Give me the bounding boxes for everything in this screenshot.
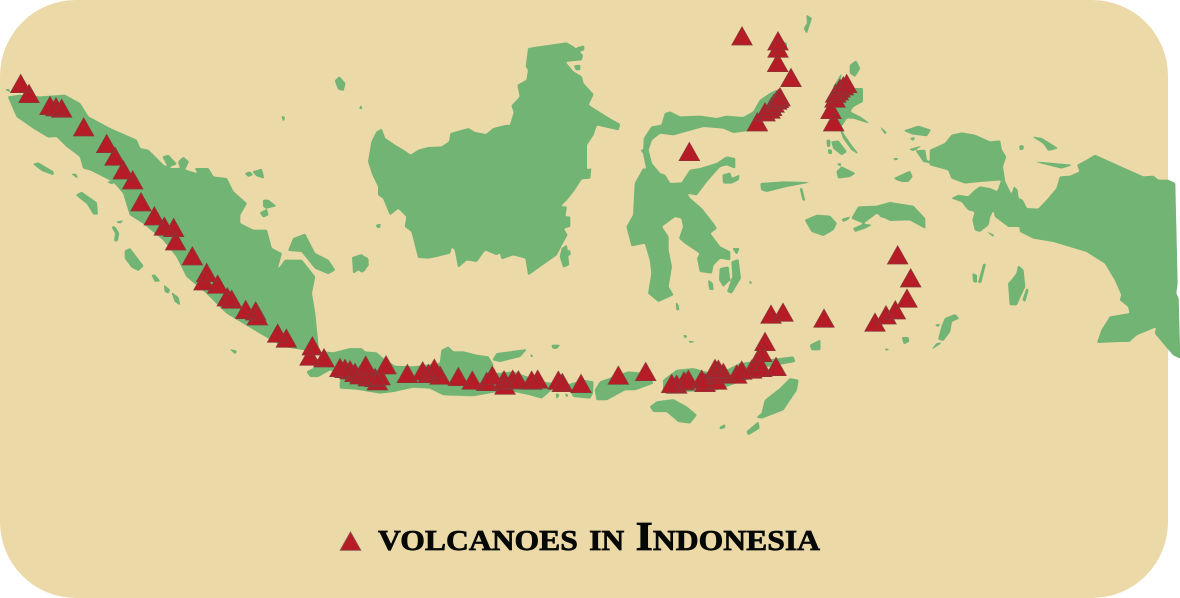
island: Papua [880, 126, 1180, 358]
markers: Java and Nusa Tenggara volcanoes [330, 332, 786, 394]
markers: Sulawesi and Maluku volcanoes [679, 27, 857, 161]
island: Java, Bali, Nusa Tenggara [307, 335, 820, 435]
title: volcanoes in Indonesia [378, 513, 820, 559]
markers: Sumatra volcanoes [10, 74, 334, 367]
island: Sumatra and nearby islands [5, 77, 381, 355]
legend: volcano marker [340, 532, 361, 550]
island: Kalimantan [360, 43, 620, 275]
markers: Banda Sea volcanoes [761, 246, 921, 331]
island: Sulawesi, Maluku [627, 15, 925, 310]
map: Indonesian islands [5, 15, 1180, 435]
